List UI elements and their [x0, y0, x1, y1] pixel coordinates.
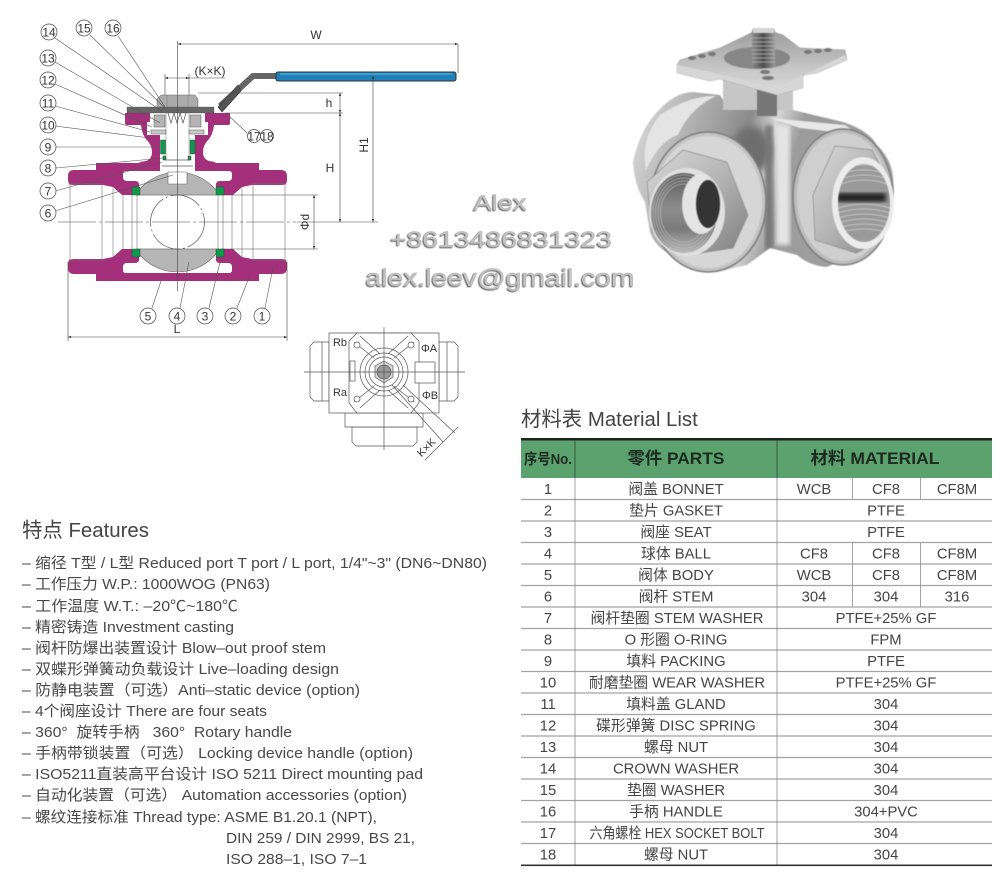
dimension lines: H	[326, 161, 334, 175]
table rows: PTFE+25% GF	[836, 611, 936, 627]
table rows: 1	[544, 482, 552, 498]
table rows: CF8	[872, 546, 900, 562]
top view drawing: K×K	[415, 436, 439, 460]
table rows: WCB	[797, 568, 831, 584]
table rows	[540, 481, 977, 864]
handle	[218, 72, 456, 112]
table rows: 304	[874, 590, 898, 606]
neck	[723, 80, 793, 116]
top view drawing: ΦB	[422, 390, 438, 402]
seats: green	[132, 187, 224, 257]
table rows: 螺母 NUT	[644, 739, 708, 756]
watermark contact: +8613486831323	[390, 227, 612, 252]
table rows: 304	[874, 783, 898, 799]
table rows: 3	[544, 525, 552, 541]
features list: – 自动化装置（可选） Automation accessories (option)	[22, 787, 407, 804]
part number callouts: 6	[45, 206, 52, 220]
features list: – 缩径 T型 / L型 Reduced port T port / L port, 1/4"~3" (DN6~DN80)	[22, 555, 487, 572]
table rows: 304	[874, 697, 898, 713]
table rows: 阀体 BODY	[638, 567, 714, 584]
watermark contact: alex.leev@gmail.com	[366, 265, 634, 292]
part number callouts: 9	[45, 140, 52, 154]
features list: ISO 288–1, ISO 7–1	[226, 851, 367, 868]
top view drawing: Rb	[333, 337, 347, 349]
table rows: 阀座 SEAT	[640, 524, 712, 541]
table rows: 14	[540, 762, 556, 778]
table rows: 304	[874, 718, 898, 734]
features list: – 防静电装置（可选）Anti–static device (option)	[22, 682, 360, 699]
table rows: CF8	[800, 546, 828, 562]
part number callouts: 13	[41, 52, 55, 66]
part number callouts: 17	[247, 130, 261, 144]
left port	[647, 132, 766, 272]
table rows: O 形圈 O-RING	[625, 632, 727, 648]
top view drawing	[304, 327, 465, 460]
table rows: 304	[874, 762, 898, 778]
features list: – 360° 旋转手柄 360° Rotary handle	[22, 724, 292, 741]
inner outline lines	[68, 184, 287, 260]
features list: – 工作温度 W.T.: –20℃~180℃	[22, 598, 238, 615]
part number callouts: 10	[41, 118, 55, 132]
dimension lines	[58, 28, 458, 341]
table rows: 耐磨垫圈 WEAR WASHER	[589, 674, 765, 692]
table rows: FPM	[870, 632, 902, 648]
valve body casting	[633, 92, 894, 272]
table rows: 手柄 HANDLE	[629, 804, 723, 820]
table rows: PTFE	[867, 525, 905, 541]
top view drawing: ΦA	[421, 343, 438, 355]
table header	[521, 438, 992, 478]
table rows: 填料 PACKING	[626, 653, 726, 670]
top view drawing: Ra	[333, 387, 348, 399]
part number callouts: 16	[106, 22, 120, 36]
dimension lines: W	[310, 28, 322, 42]
material table	[521, 438, 992, 866]
table rows: 2	[544, 504, 552, 520]
product photo: three-way ball valve	[633, 28, 894, 272]
features list	[22, 555, 487, 868]
table rows: 垫片 GASKET	[629, 502, 723, 520]
part number callouts: 15	[77, 22, 91, 36]
features list: – 工作压力 W.P.: 1000WOG (PN63)	[22, 576, 270, 593]
watermark contact: Alex	[474, 192, 527, 215]
table header: 零件 PARTS	[628, 449, 724, 468]
dimension lines: L	[174, 322, 181, 336]
part number callouts: 2	[230, 310, 237, 324]
features list: – 精密铸造 Investment casting	[22, 619, 234, 636]
table rows: 304	[874, 740, 898, 756]
table rows: 304+PVC	[854, 804, 918, 820]
part number callouts: 11	[42, 96, 55, 110]
table rows: 316	[945, 590, 969, 606]
features list: – ISO5211直装高平台设计 ISO 5211 Direct mounting pad	[22, 766, 423, 783]
section drawing: valve cross-section	[68, 72, 456, 281]
table rows: 11	[540, 697, 556, 713]
table rows: 填料盖 GLAND	[626, 696, 726, 713]
table rows: 4	[544, 546, 552, 562]
table rows: 球体 BALL	[641, 546, 711, 562]
table rows: 17	[540, 826, 556, 842]
table rows: 7	[544, 611, 552, 627]
table rows: 10	[540, 676, 556, 692]
table header: 序号No.	[524, 450, 572, 468]
table rows: CF8M	[937, 482, 977, 498]
table rows: 15	[540, 783, 556, 799]
table rows: 304	[874, 848, 898, 864]
table rows: 六角螺栓 HEX SOCKET BOLT	[590, 825, 764, 842]
part number callouts: 14	[42, 26, 56, 40]
table header: 材料 MATERIAL	[810, 449, 940, 468]
heading: features: 特点 Features	[22, 519, 149, 542]
features list: – 阀杆防爆出装置设计 Blow–out proof stem	[22, 640, 326, 657]
table rows: 6	[544, 590, 552, 606]
table rows: CROWN WASHER	[613, 762, 739, 778]
dimension lines: Φd	[298, 214, 312, 230]
table rows: 304	[874, 826, 898, 842]
part number callouts: 12	[41, 74, 55, 88]
table rows: CF8M	[937, 546, 977, 562]
part number callouts: 5	[145, 310, 152, 324]
part number callouts: 18	[260, 130, 274, 144]
table rows: PTFE+25% GF	[836, 676, 936, 692]
table rows: 304	[802, 590, 826, 606]
table rows: 18	[540, 848, 556, 864]
part number callouts: 7	[45, 184, 52, 198]
table rows: 阀盖 BONNET	[628, 481, 724, 498]
nut and plate	[127, 95, 214, 113]
table rows: 9	[544, 654, 552, 670]
part number callouts: 3	[202, 310, 209, 324]
table rows: CF8	[872, 568, 900, 584]
table rows: 16	[540, 804, 556, 820]
right port	[793, 129, 894, 265]
features list: – 双蝶形弹簧动负载设计 Live–loading design	[22, 661, 339, 678]
watermark contact	[366, 192, 634, 292]
features list: – 4个阀座设计 There are four seats	[22, 703, 267, 720]
table rows: 阀杆垫圈 STEM WASHER	[591, 610, 763, 627]
heading: material list: 材料表 Material List	[521, 408, 698, 431]
table rows: 阀杆 STEM	[639, 588, 713, 606]
table rows: 5	[544, 568, 552, 584]
body: purple castings	[68, 113, 287, 281]
features list: DIN 259 / DIN 2999, BS 21,	[226, 830, 415, 847]
part number callouts: 4	[174, 310, 181, 324]
table rows: 13	[540, 740, 556, 756]
ball	[125, 172, 230, 272]
dimension lines: H1	[357, 137, 371, 153]
mounting plate	[677, 28, 847, 95]
part number callouts	[40, 20, 274, 324]
table rows: 垫圈 WASHER	[627, 782, 725, 799]
table rows: PTFE	[867, 504, 905, 520]
features list: – 螺纹连接标准 Thread type: ASME B1.20.1 (NPT),	[22, 809, 377, 826]
dimension lines: (K×K)	[194, 64, 226, 78]
part number callouts: 1	[259, 310, 266, 324]
table rows: 8	[544, 632, 552, 648]
features list: – 手柄带锁装置（可选） Locking device handle (option)	[22, 745, 413, 762]
table rows: 12	[540, 718, 556, 734]
table rows: 碟形弹簧 DISC SPRING	[596, 718, 756, 734]
part number callouts: 8	[45, 162, 52, 176]
table rows: 螺母 NUT	[644, 846, 708, 864]
stem and packing	[151, 113, 204, 184]
table rows: CF8M	[937, 568, 977, 584]
table rows: PTFE	[867, 654, 905, 670]
dimension lines: h	[326, 96, 332, 110]
table rows: WCB	[797, 482, 831, 498]
table rows: CF8	[872, 482, 900, 498]
